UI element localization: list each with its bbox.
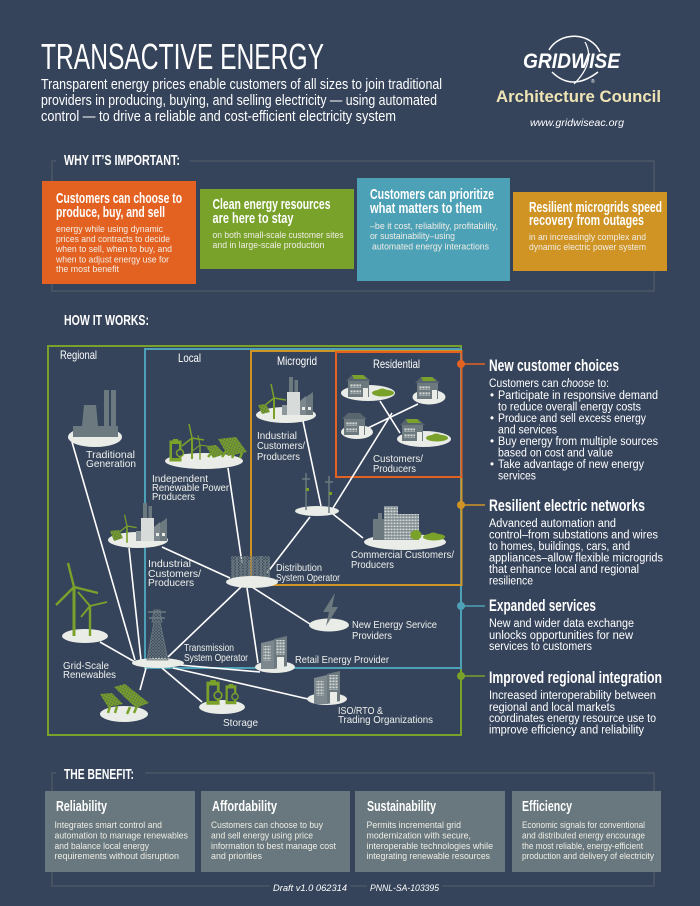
text block: new customer choices: based on cost and value [498,448,613,460]
text block: new customer choices: Participate in responsive demand [498,390,658,402]
node: industrial customers microgrid: Customers/ [257,440,305,452]
card: customers choose [42,181,196,284]
card: reliability: requirements without disruption [54,851,179,862]
text block: resilient electric networks: Advanced automation and [489,518,616,530]
node: independent renewable power producers: Independent [152,473,208,485]
text block: new customer choices: Take advantage of new energy [498,459,644,471]
text block: expanded services: Expanded services [489,596,596,615]
node: microgrid poles [295,473,339,516]
connector: expanded services [457,602,485,610]
card: reliability [45,791,195,872]
zone: residential [336,352,462,477]
card: affordability [201,791,350,872]
heading: how it works: HOW IT WORKS: [64,312,149,329]
node: residential customers: Customers/ [373,453,423,465]
text block: resilient electric networks: that enhance local and regional [489,564,639,576]
node: solar panels [100,684,149,722]
card: affordability: and sell energy using price [211,830,313,842]
node: traditional generation: Generation [86,458,136,470]
node: traditional generation [68,390,136,470]
node: grid-scale renewables [56,563,116,681]
section frame: why [52,161,654,291]
node: industrial customers microgrid: Industrial [257,430,297,442]
card: customers choose: energy while using dynamic [56,224,163,235]
intro text: control — to drive a reliable and cost-efficient electricity system [41,108,396,125]
text block: new customer choices: Customers can choose to: [489,378,609,390]
logo: GridWise Architecture Council: Architecture Council [496,87,661,106]
card: efficiency: the most reliable, energy-efficient [522,841,643,852]
zone: microgrid [251,351,462,585]
zone: regional [48,346,461,735]
card: reliability: automation to manage renewables [54,830,188,842]
intro text: providers in producing, buying, and selling electricity — using automated [41,92,437,109]
card: customers choose: the most benefit [56,264,119,275]
zone: local [145,349,461,668]
card: sustainability: Permits incremental grid [366,820,461,831]
card: microgrids [513,192,667,271]
card: microgrids: in an increasingly complex and [529,232,646,243]
node: grid-scale renewables: Renewables [63,669,116,681]
node: industrial customers local: Industrial [148,558,191,570]
text block: improved regional integration: improve efficiency and reliability [489,724,644,736]
card: customers choose: when to adjust energy use for [55,254,169,266]
text block: new customer choices: and services [498,424,557,436]
node: retail energy provider [255,636,389,673]
card: reliability: Integrates smart control and [54,820,162,831]
card: reliability: Reliability [56,798,107,815]
heading: why it's important: WHY IT’S IMPORTANT: [64,152,180,169]
card: customers choose: prices and contracts to decide [56,234,170,245]
text block: improved regional integration [489,668,662,736]
card: clean energy: on both small-scale customer sites [212,230,344,241]
card: prioritize [357,178,510,281]
logo: GridWise Architecture Council: ® [591,78,595,85]
text block: new customer choices [489,356,658,482]
card: prioritize: what matters to them [369,200,482,217]
section frame: benefit [52,773,654,886]
zone: residential: Residential [373,357,420,371]
card: affordability: information to best manage cost [211,841,336,852]
text block: new customer choices: services [498,470,536,482]
text block: expanded services: New and wider data exchange [489,618,634,630]
connector: resilient networks [457,501,485,509]
node: traditional generation: Traditional [86,449,135,461]
card: clean energy: are here to stay [212,210,294,227]
node: new energy service providers [309,593,437,642]
card: sustainability: Sustainability [367,798,436,815]
text block: new customer choices: • [490,390,494,402]
card: sustainability: integrating renewable resources [366,851,490,862]
card: clean energy: and in large-scale production [212,240,324,251]
text block: new customer choices: Produce and sell excess energy [498,413,646,425]
text block: new customer choices: • [490,459,494,471]
title: TRANSACTIVE ENERGY [41,36,324,77]
node: residential customers [341,375,451,475]
card: customers choose: produce, buy, and sell [56,204,165,221]
node: grid-scale renewables: Grid-Scale [63,660,109,672]
zone: microgrid: Microgrid [277,354,317,368]
node: independent renewable power producers: Producers [152,491,195,503]
node: storage [199,680,258,729]
card: microgrids: dynamic electric power system [529,242,646,253]
node: industrial customers microgrid: Producers [257,451,300,463]
text block: resilient electric networks: appliances–allow flexible microgrids [489,552,663,564]
node: commercial customers [351,506,454,571]
connection lines [72,401,418,702]
text block: new customer choices: to reduce overall energy costs [498,402,641,414]
text block: resilient electric networks: control–from substations and wires [489,530,658,542]
card: efficiency [512,791,661,872]
node: industrial customers local [108,503,201,589]
node: new energy service providers: Providers [352,630,392,642]
text block: new customer choices: • [490,413,494,425]
logo: GridWise Architecture Council: GRIDWISE [523,50,621,73]
logo: GridWise Architecture Council: www.gridwiseac.org [530,117,624,129]
node: storage: Storage [223,717,258,729]
card: affordability: and priorities [211,851,262,862]
text block: new customer choices: • [490,436,494,448]
node: independent renewable power producers [152,424,247,503]
text block: expanded services: services to customers [489,641,592,653]
node: independent renewable power producers: Renewable Power [152,482,229,494]
text block: improved regional integration: Increased interoperability between [489,690,656,702]
node: distribution system operator: Distribution [276,562,322,574]
text block: resilient electric networks: resilience [489,576,533,588]
node: retail energy provider: Retail Energy Provider [295,654,389,666]
node: industrial customers microgrid [256,377,316,463]
card: affordability: Customers can choose to buy [211,820,323,831]
zone: regional: Regional [60,348,97,362]
node: new energy service providers: New Energy Service [352,619,437,631]
card: prioritize: –be it cost, reliability, profitability, [370,221,498,232]
text block: resilient electric networks: to homes, buildings, cars, and [489,541,630,553]
card: prioritize: Customers can prioritize [370,186,494,203]
intro text: Transparent energy prices enable customers of all sizes to join traditional [41,76,442,93]
text block: improved regional integration: coordinates energy resource use to [489,713,656,725]
footer: draft: Draft v1.0 062314 [273,883,347,894]
card: microgrids: recovery from outages [529,212,644,229]
card: efficiency: and distributed energy encourage [522,830,645,842]
node: distribution system operator: System Operator [276,572,340,584]
node: ISO/RTO: Trading Organizations [338,714,433,726]
text block: expanded services: unlocks opportunities for new [489,630,634,642]
card: clean energy: Clean energy resources [212,196,330,213]
text block: resilient electric networks [489,496,663,588]
node: transmission system operator: Transmission [184,642,234,654]
connector: regional integration [457,672,485,680]
card: customers choose: when to sell, when to buy, and [55,244,172,255]
node: ISO/RTO: ISO/RTO & [338,705,383,717]
card: clean energy [200,189,354,269]
text block: improved regional integration: regional and local markets [489,702,615,714]
text block: expanded services [489,596,634,653]
node: commercial customers: Producers [351,559,394,571]
node: commercial customers: Commercial Customers/ [351,549,454,561]
text block: resilient electric networks: Resilient electric networks [489,496,645,515]
node: ISO/RTO [307,671,433,726]
card: affordability: Affordability [212,798,277,815]
node: distribution system operator [226,556,340,588]
node: industrial customers local: Customers/ [148,568,201,580]
card: efficiency: production and delivery of electricity [522,851,654,862]
card: sustainability: modernization with secure, [366,830,471,842]
card: sustainability [355,791,505,872]
card: prioritize: or sustainability–using [370,231,455,242]
node: residential customers: Producers [373,463,416,475]
card: efficiency: Economic signals for conventional [522,820,645,831]
heading: the benefit: THE BENEFIT: [64,766,134,783]
text block: new customer choices: New customer choices [489,356,619,375]
card: prioritize: automated energy interactions [372,242,489,252]
card: efficiency: Efficiency [522,798,572,815]
card: reliability: and balance local energy [54,841,149,852]
footer: document id: PNNL-SA-103395 [370,883,440,894]
card: customers choose: Customers can choose to [56,190,182,207]
intro text [41,76,442,125]
connector: new customer choices [457,360,485,368]
zone: local: Local [178,351,201,365]
card: sustainability: interoperable technologies while [366,841,493,852]
node: industrial customers local: Producers [148,577,194,589]
node: transmission system operator [132,610,248,668]
diagram [48,346,462,735]
text block: new customer choices: Buy energy from multiple sources [498,436,658,448]
node: transmission system operator: System Operator [184,652,248,664]
logo: GridWise Architecture Council [496,36,661,129]
